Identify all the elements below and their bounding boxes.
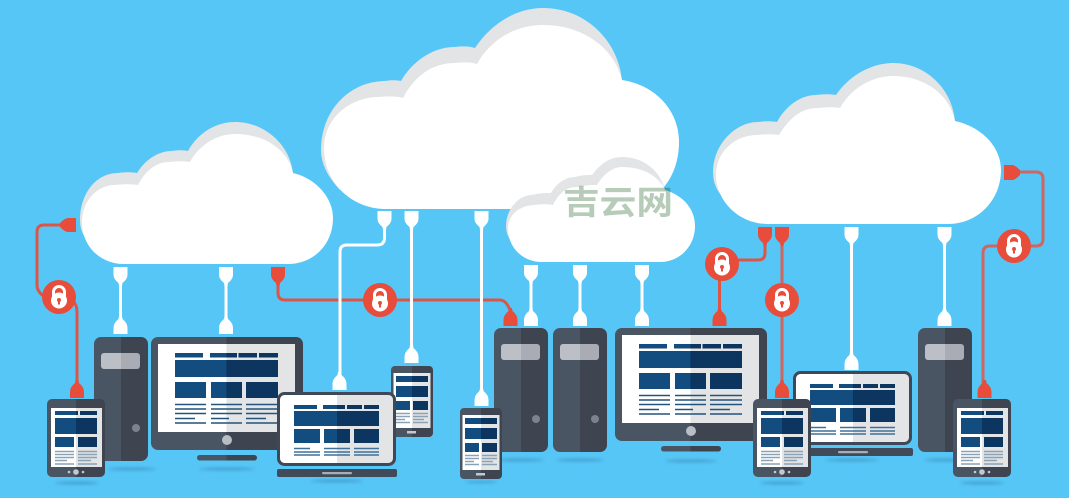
red cable to server via lock [271,267,518,326]
white cable to left monitor [219,267,233,334]
white cable to phone one [474,211,488,406]
ground shadows [55,459,1004,484]
lock left [42,280,76,314]
right cloud [713,63,1001,224]
lock right [997,229,1031,263]
connector cables: centre cloud [332,211,649,406]
white cable to right tower [938,227,952,326]
connector cables: left cloud [37,218,518,398]
tower left [94,337,148,461]
laptop left [277,394,397,477]
tablet centre-right [753,399,811,477]
laptop right [793,372,913,456]
monitor left [151,337,303,460]
tablet left [47,399,105,477]
server two [553,328,607,452]
phone upper [391,366,433,437]
left cloud [80,122,333,264]
white cables from small cloud [524,265,649,326]
red cable to tablet [775,227,789,398]
connector cables: right cloud [712,165,1043,398]
devices [47,328,1011,479]
watermark: 吉云网 [563,184,673,221]
centre cloud [321,8,679,209]
monitor centre [615,328,767,452]
tablet right [953,399,1011,477]
white cable to phone two [404,211,418,363]
red cable to left tablet via lock [37,218,84,398]
white cable to right laptop [844,227,858,370]
padlock icons [42,229,1031,317]
small front cloud [506,157,695,262]
white cable to left tower [114,267,128,334]
red cable to right tablet [978,165,1043,398]
red cable to centre monitor [712,227,772,326]
lock on monitor cable [705,247,739,281]
lock on tablet cable [765,283,799,317]
server one [494,328,548,452]
phone lower [460,408,502,479]
white cable to laptop [332,211,392,390]
lock centre-left [363,283,397,317]
server right [918,328,972,452]
